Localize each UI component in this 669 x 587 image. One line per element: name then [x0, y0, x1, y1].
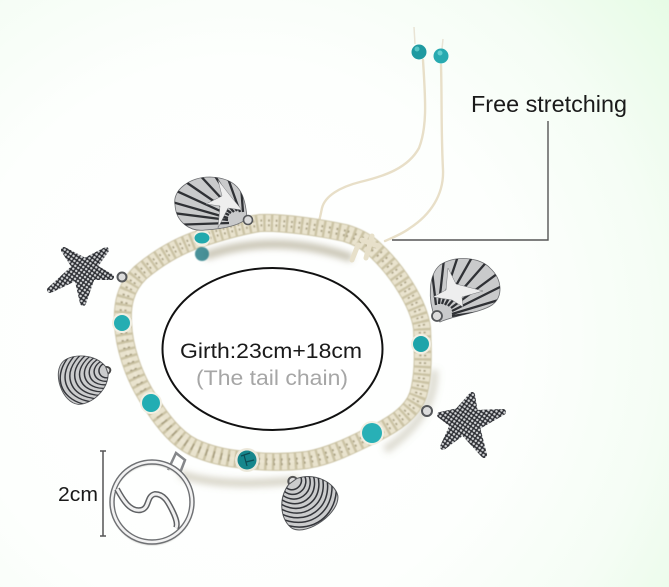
girth label: Girth:23cm+18cm	[180, 339, 362, 363]
cord end bead: right	[434, 39, 448, 64]
charm: wave circle	[112, 453, 192, 544]
charm: clam left	[49, 323, 163, 418]
2cm size bracket	[100, 451, 106, 536]
bead: bottom	[235, 448, 259, 472]
bead shadow	[195, 247, 209, 261]
charm: scallop right	[430, 258, 500, 322]
slip knot	[352, 236, 378, 260]
drop shadow under bracelet	[180, 244, 434, 483]
bead: top	[194, 230, 210, 246]
braided bracelet band	[123, 223, 423, 462]
drawstring cords	[316, 60, 443, 241]
tail chain note: (The tail chain)	[196, 367, 348, 390]
charm: scallop top	[174, 176, 254, 231]
2cm size label: 2cm	[58, 484, 98, 506]
turquoise beads	[112, 230, 431, 472]
bead: right	[411, 334, 431, 354]
bead: lower left	[140, 392, 162, 414]
bead: lower right	[360, 421, 384, 445]
cord end bead: left	[412, 27, 426, 60]
free stretching label: Free stretching	[471, 91, 627, 117]
charm: starfish left	[50, 250, 126, 303]
charm: starfish right	[422, 395, 503, 455]
free stretching leader line	[392, 121, 548, 240]
charm: clam bottom	[231, 418, 355, 545]
bead: left	[112, 313, 132, 333]
dimension ellipse	[162, 268, 382, 430]
